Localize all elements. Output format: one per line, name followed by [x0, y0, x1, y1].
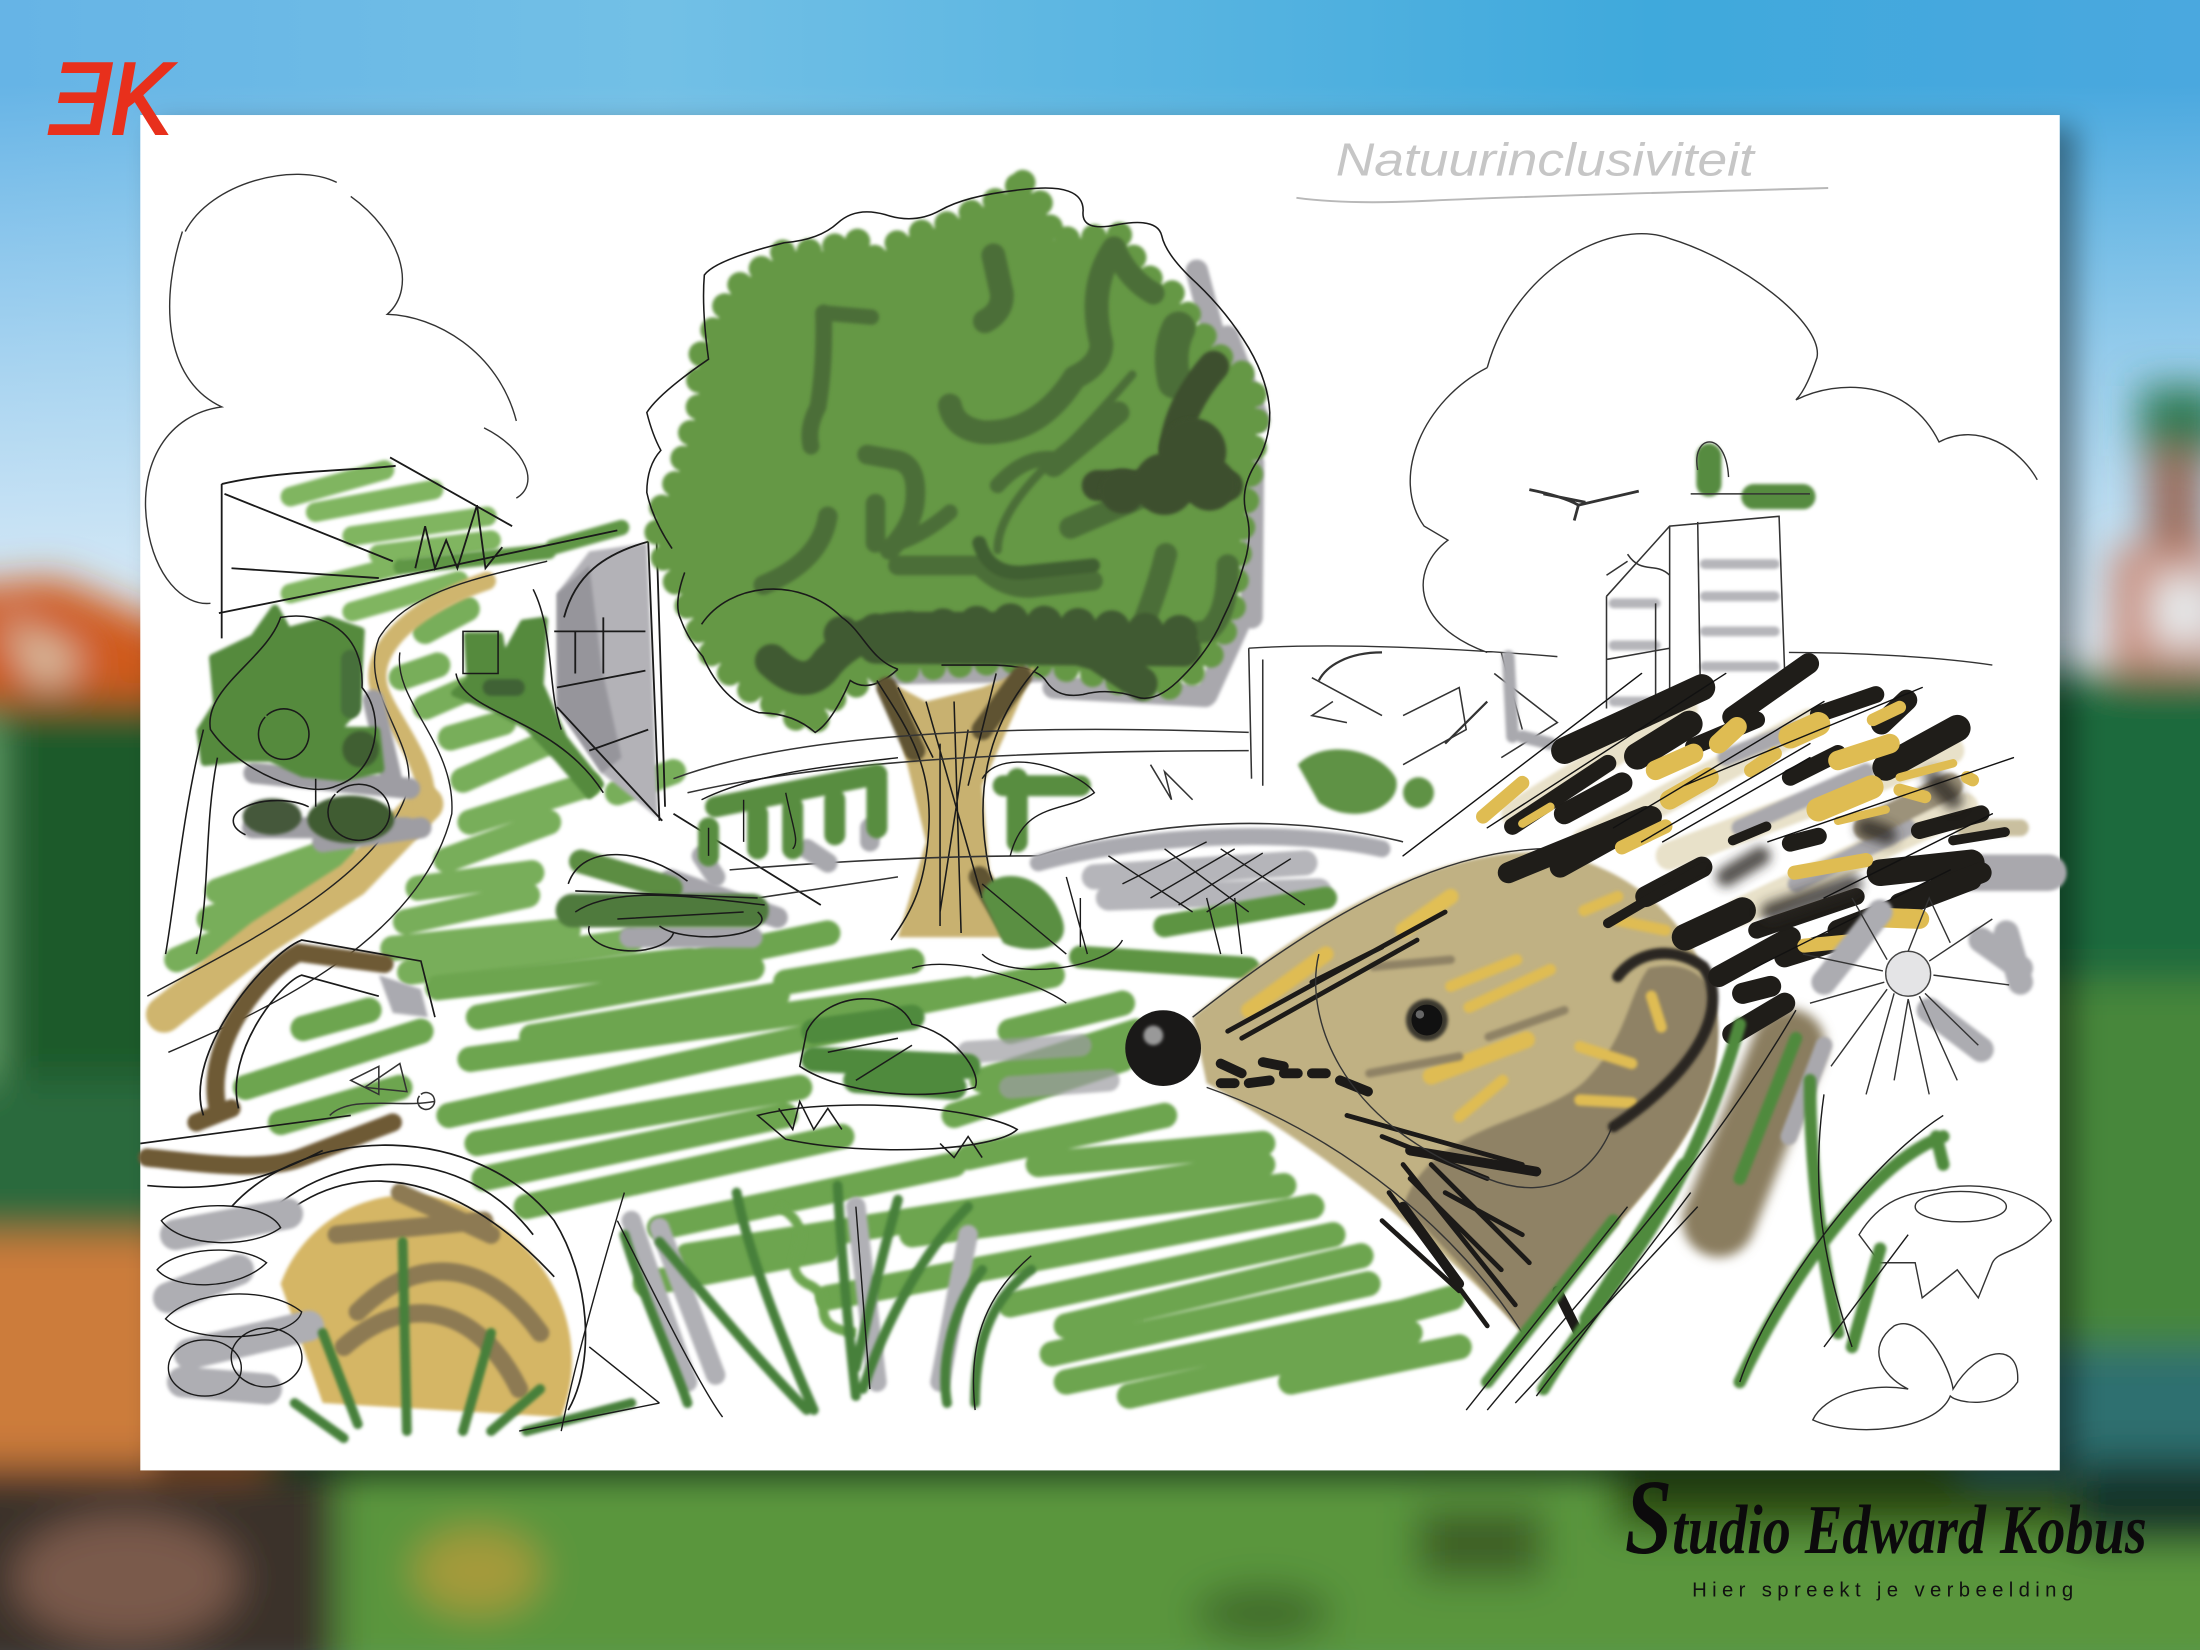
white flower outlines [1813, 1186, 2051, 1430]
handwritten heading [1296, 133, 1828, 202]
large tree [647, 182, 1270, 940]
handwritten heading: Natuurinclusiviteit [1336, 133, 1756, 185]
right cloud outline [1249, 234, 2037, 665]
right tower with green roof [1607, 442, 1810, 709]
hedgehog [1125, 664, 2048, 1333]
icon: bird [1529, 490, 1639, 521]
tan root branch [140, 940, 435, 1187]
main lawn hatching [246, 933, 1459, 1396]
studio signature logo: Hier spreekt je verbeelding [1692, 1580, 2077, 1602]
winding tan path [147, 561, 547, 1052]
left building and green roof [219, 457, 821, 905]
insect on log [330, 1064, 435, 1115]
pond with hatching [912, 837, 1382, 1003]
tree canopy [647, 182, 1270, 732]
hedgehog head [1125, 848, 1718, 1333]
hedgehog spine underlay [1515, 709, 2048, 912]
hedgehog ear [1614, 953, 1713, 1127]
left cloud outline [146, 174, 528, 603]
hedgehog neck shade [1719, 1045, 1824, 1221]
green bush by bridge [1298, 749, 1434, 814]
centre lawn bush [758, 999, 1108, 1158]
white drawing card [140, 115, 2060, 1470]
tree trunk [877, 666, 1038, 940]
foreground reeds [295, 1186, 1031, 1438]
hedgehog nose [1125, 1010, 1201, 1086]
daisy flower [1803, 898, 2020, 1094]
hanging bushes under bridge [702, 758, 1094, 877]
grey shadow behind tree [880, 271, 1259, 696]
mid lawn bush [568, 855, 777, 951]
log [232, 1145, 586, 1417]
foreground tall grass [1466, 1010, 1943, 1410]
hedgehog eye [1406, 999, 1448, 1041]
hedgehog spines [1403, 664, 2013, 1034]
left bushes and trees [166, 589, 603, 954]
left meadow hatching [177, 609, 673, 972]
small green squiggle path in grass [779, 1207, 856, 1333]
logo mark: EK: ƎK [49, 43, 175, 155]
stones [157, 1206, 309, 1396]
bridge and background sketch lines [673, 648, 1557, 898]
